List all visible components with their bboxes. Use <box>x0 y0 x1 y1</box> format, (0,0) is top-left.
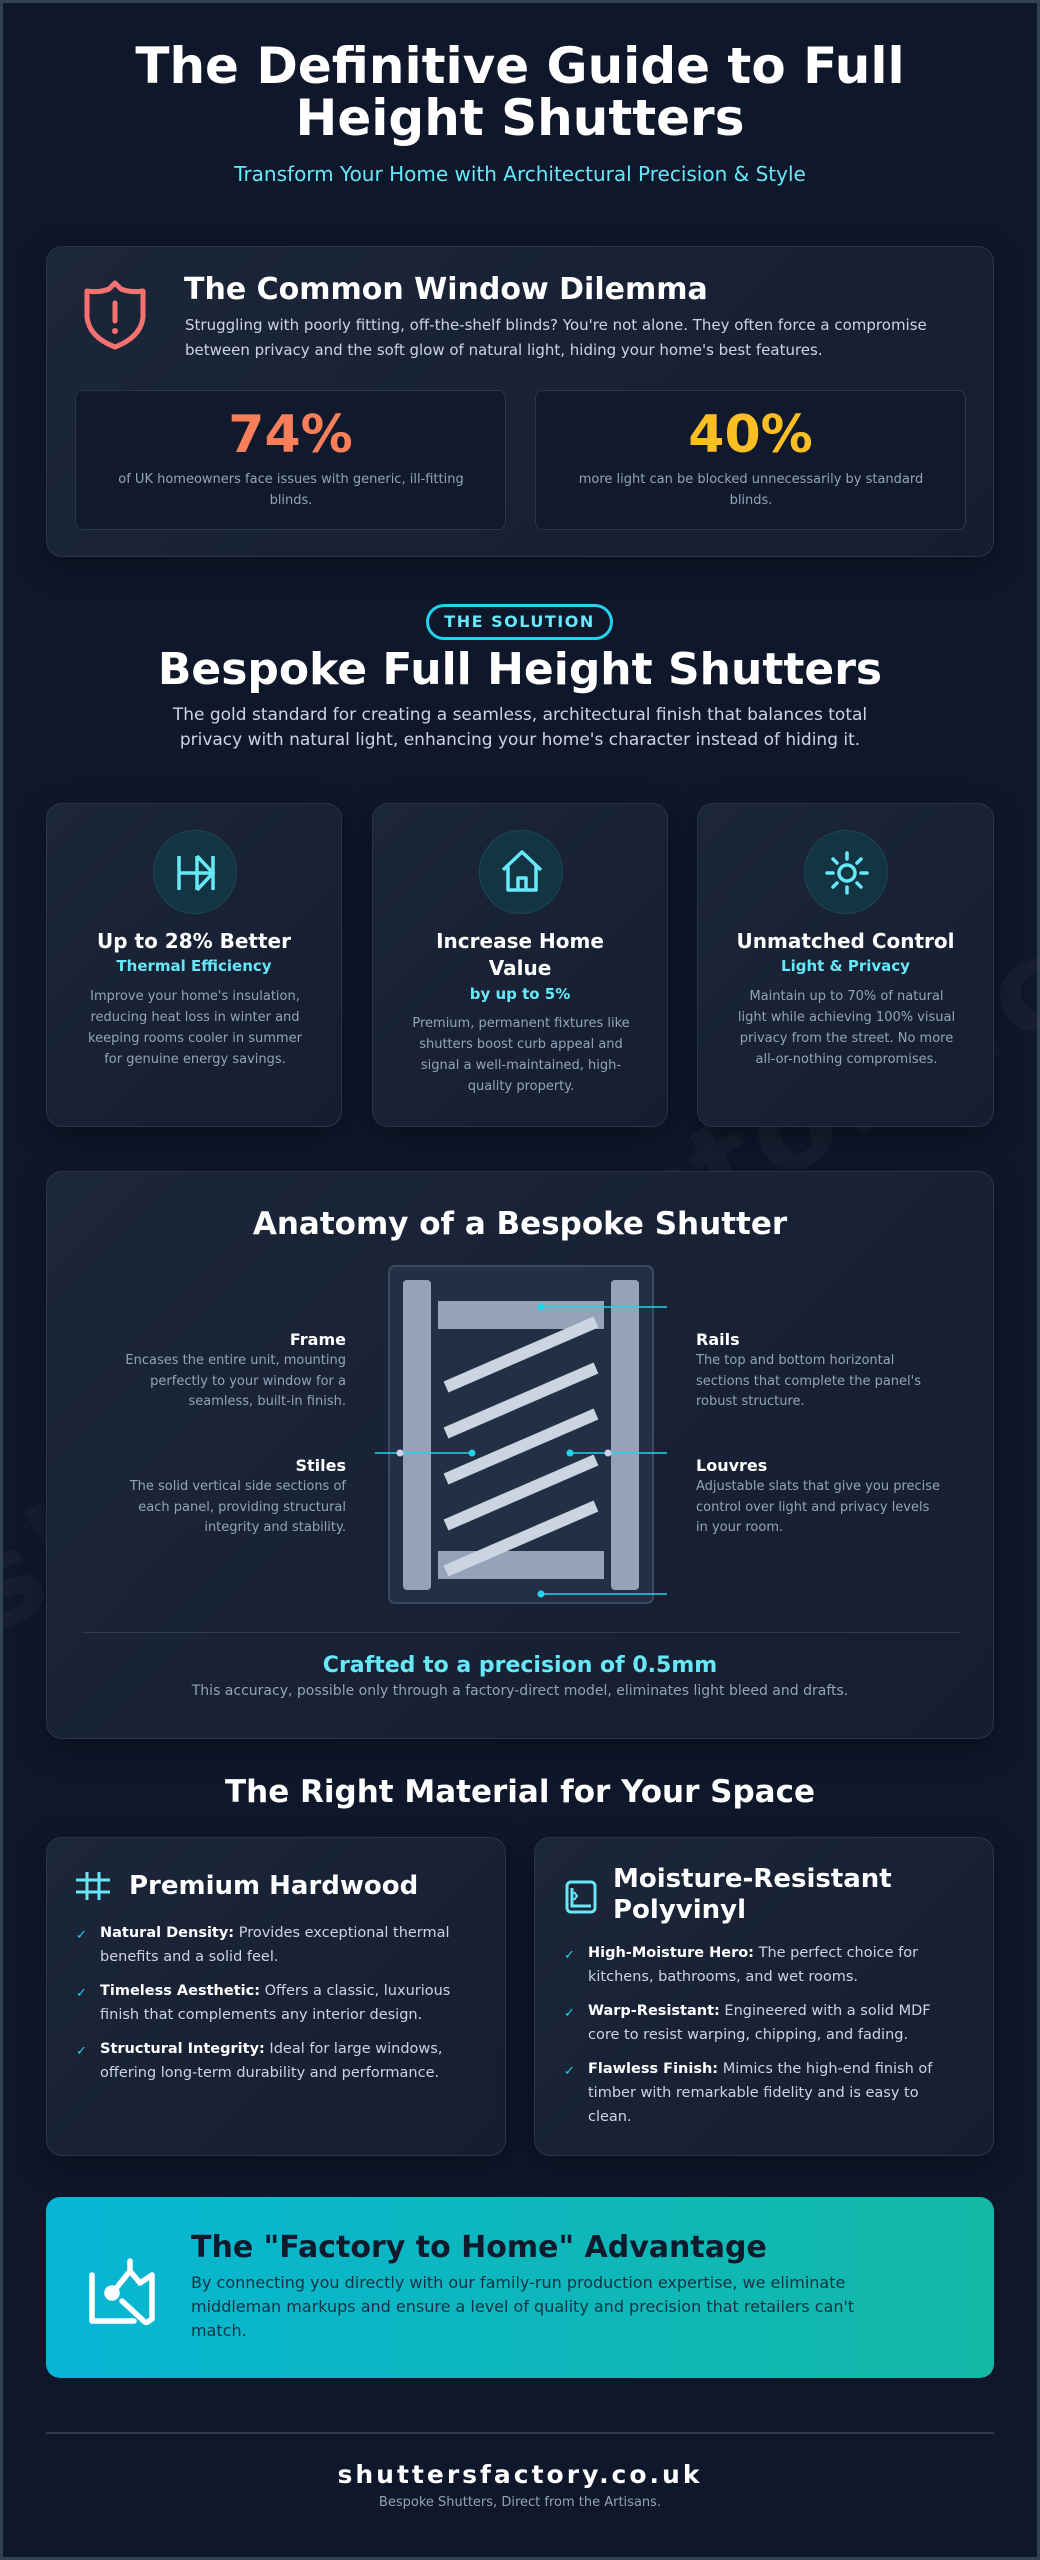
label: louvres: Adjustable slats that give you precise <box>696 1479 940 1494</box>
label: stiles: integrity and stability. <box>204 1520 346 1535</box>
list: kitchens, bathrooms, and wet rooms. <box>588 1969 858 1985</box>
label: stiles: The solid vertical side sections of <box>130 1479 346 1494</box>
stat: 40% <box>535 390 966 530</box>
list: Natural Density: Provides exceptional thermal benefits and a solid feel. <box>100 1925 450 1965</box>
panel: thermal: Improve your home's insulation, <box>90 989 300 1004</box>
title <box>135 37 905 147</box>
panel: control <box>697 803 994 1127</box>
heading: materials: The Right Material for Your Space <box>225 1774 815 1810</box>
footer: brand: shuttersfactory.co.uk <box>338 2460 702 2489</box>
heading: bespoke: Bespoke Full Height Shutters <box>158 644 882 695</box>
pill: the solution <box>426 604 613 640</box>
card title: Polyvinyl <box>613 1895 746 1925</box>
panel: hardwood <box>46 1837 506 2156</box>
panel: control: light while achieving 100% visual <box>738 1010 955 1025</box>
stat: 74% <box>75 390 506 530</box>
label: louvres <box>696 1456 940 1535</box>
label: frame: perfectly to your window for a <box>150 1374 346 1388</box>
footer: brand <box>338 2460 702 2510</box>
card title: Unmatched Control <box>736 929 954 953</box>
label: rails: sections that complete the panel's <box>696 1374 921 1388</box>
stat: 40%: more light can be blocked unnecessarily by standard blinds. <box>579 472 923 508</box>
text block: solution intro: The gold standard for creating a seamless, architectural finish that balances total privacy with natural light, enhancing your home's character instead of hiding it. <box>173 705 867 750</box>
panel: thermal: keeping rooms cooler in summer <box>88 1031 302 1046</box>
label: stiles: each panel, providing structural <box>138 1500 346 1514</box>
callout: factory to home <box>46 2197 994 2378</box>
panel: thermal: for genuine energy savings. <box>104 1052 286 1067</box>
panel: anatomy <box>46 1171 994 1739</box>
icon: factory hand <box>89 2258 155 2325</box>
panel: thermal: reducing heat loss in winter and <box>90 1010 300 1025</box>
pill: the solution: THE SOLUTION <box>444 612 595 631</box>
text block: Struggling with poorly fitting, off-the-shelf blinds? You're not alone. They often force a compromise between privacy and the soft glow of natural light, hiding your home's best features. <box>185 316 927 359</box>
list: clean. <box>588 2109 632 2125</box>
label: rails: Rails <box>696 1330 740 1349</box>
stat: 40%: 40% <box>688 405 813 465</box>
panel: home value: shutters boost curb appeal and <box>419 1037 623 1052</box>
label: rails <box>696 1330 921 1409</box>
list: Structural Integrity: Ideal for large windows, offering long-term durability and performance. <box>100 2041 442 2081</box>
label: rails: robust structure. <box>696 1394 805 1409</box>
list: Flawless Finish: Mimics the high-end finish of <box>588 2061 932 2077</box>
stat: 74%: of UK homeowners face issues with generic, ill-fitting blinds. <box>118 472 464 508</box>
label: frame: Frame <box>290 1330 346 1349</box>
list: High-Moisture Hero: The perfect choice for <box>588 1945 918 1961</box>
card title <box>613 1864 892 1925</box>
panel: thermal: Thermal Efficiency <box>116 957 272 975</box>
text block: middleman markups and ensure a level of quality and precision that retailers can't <box>191 2297 854 2316</box>
label: louvres: control over light and privacy levels <box>696 1500 929 1514</box>
icon: thermal <box>153 830 237 914</box>
shutter diagram <box>375 1265 667 1604</box>
stat: 74%: 74% <box>228 405 353 465</box>
card title <box>436 929 604 980</box>
heading: Anatomy of a Bespoke Shutter <box>253 1206 787 1242</box>
label: louvres: Louvres <box>696 1456 767 1475</box>
title: The Definitive Guide to Full <box>135 37 905 95</box>
label: stiles <box>130 1456 346 1535</box>
panel: control: Maintain up to 70% of natural <box>749 989 944 1004</box>
list: Warp-Resistant: Engineered with a solid MDF <box>588 2003 931 2019</box>
footer: brand: Bespoke Shutters, Direct from the Artisans. <box>379 2495 661 2510</box>
panel: polyvinyl <box>534 1837 994 2156</box>
callout: precision: This accuracy, possible only through a factory-direct model, eliminates light bleed and drafts. <box>192 1683 848 1699</box>
icon: house <box>479 830 563 914</box>
heading: The "Factory to Home" Advantage <box>191 2230 767 2265</box>
panel: control: Light & Privacy <box>781 957 910 975</box>
card title: Moisture-Resistant <box>613 1864 892 1894</box>
card title: Up to 28% Better <box>97 929 291 953</box>
card title: Value <box>489 956 551 980</box>
label: rails: The top and bottom horizontal <box>696 1353 894 1368</box>
text block: match. <box>191 2321 247 2340</box>
panel: control: all-or-nothing compromises. <box>755 1052 938 1067</box>
label: louvres: in your room. <box>696 1520 783 1535</box>
text block <box>191 2273 854 2340</box>
list: core to resist warping, chipping, and fading. <box>588 2027 908 2043</box>
card title: Increase Home <box>436 929 604 953</box>
icon: shield warning <box>84 280 146 350</box>
callout: precision <box>192 1653 848 1699</box>
panel: home value: signal a well-maintained, high- <box>421 1058 621 1073</box>
panel: home value: by up to 5% <box>470 985 570 1003</box>
panel: window dilemma <box>46 246 994 557</box>
list <box>566 1945 933 2125</box>
panel: home value: quality property. <box>468 1079 574 1094</box>
heading: The Common Window Dilemma <box>184 272 708 307</box>
icon: grain <box>76 1872 110 1900</box>
text block: By connecting you directly with our family-run production expertise, we eliminate <box>191 2273 845 2292</box>
card title: Premium Hardwood <box>129 1871 418 1901</box>
list: Timeless Aesthetic: Offers a classic, luxurious finish that complements any interior design. <box>100 1983 450 2023</box>
label: frame: Encases the entire unit, mounting <box>125 1353 346 1368</box>
subtitle: Transform Your Home with Architectural Precision & Style <box>234 162 806 186</box>
panel: home value <box>372 803 668 1127</box>
label: frame: seamless, built-in finish. <box>188 1394 346 1409</box>
list <box>78 1925 450 2081</box>
title: Height Shutters <box>296 89 744 147</box>
label: stiles: Stiles <box>295 1456 346 1475</box>
label: frame <box>125 1330 346 1409</box>
callout: precision: Crafted to a precision of 0.5mm <box>323 1653 717 1678</box>
list: timber with remarkable fidelity and is easy to <box>588 2085 919 2101</box>
icon: sun <box>804 830 888 914</box>
panel: control: privacy from the street. No more <box>740 1031 953 1046</box>
panel: home value: Premium, permanent fixtures like <box>412 1016 630 1031</box>
panel: thermal <box>46 803 342 1127</box>
icon: moisture <box>566 1880 596 1914</box>
